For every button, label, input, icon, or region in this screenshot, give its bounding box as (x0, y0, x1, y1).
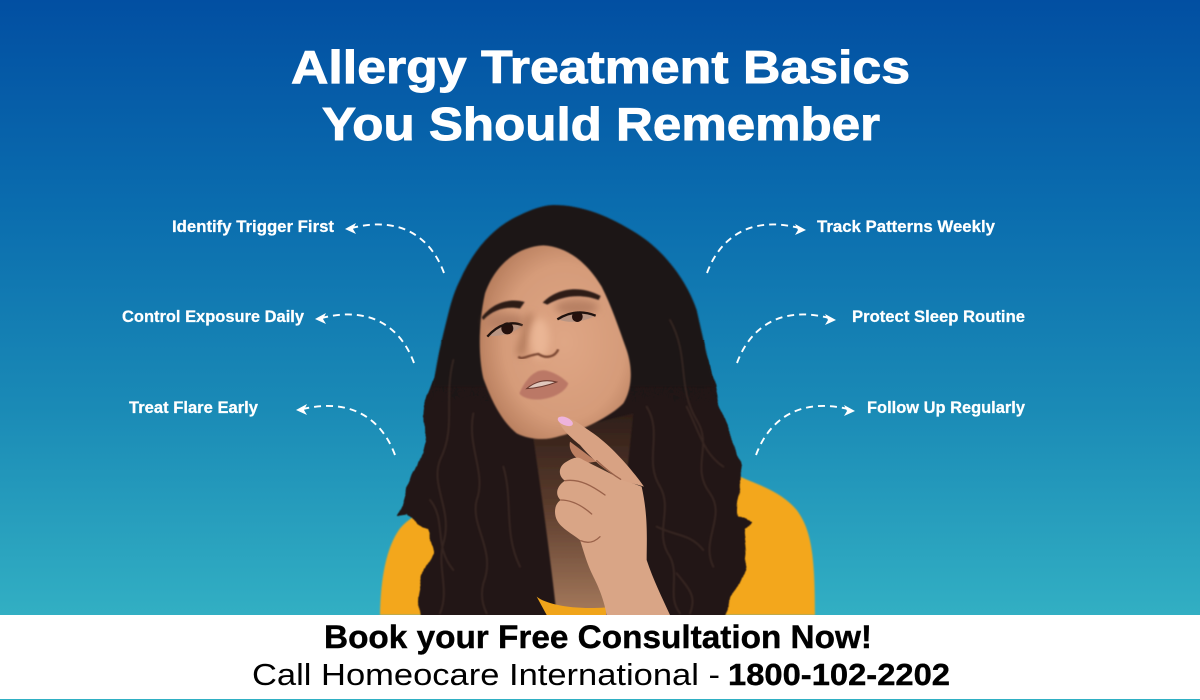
nose highlight (531, 318, 549, 358)
right eyebrow (543, 289, 601, 305)
right label: Track Patterns Weekly: Track Patterns Weekly (817, 218, 996, 236)
title (291, 41, 910, 150)
knuckle creases (561, 461, 621, 542)
upper smooth hair (433, 205, 713, 387)
lower wavy hair (396, 340, 753, 615)
title: Allergy Treatment Basics (291, 41, 910, 93)
left label: Control Exposure Daily (122, 308, 414, 363)
right label: Track Patterns Weekly (707, 218, 996, 273)
left label: Identify Trigger First (172, 218, 444, 273)
illustration: woman touching her chin (380, 205, 815, 620)
right label: Protect Sleep Routine: Protect Sleep Routine (852, 308, 1025, 326)
shirt collar (537, 597, 606, 615)
lips (519, 370, 568, 400)
nose shadow side (517, 313, 533, 357)
phone number: 1800-102-2202 (728, 657, 950, 692)
hair strands (430, 320, 723, 613)
left label: Treat Flare Early (129, 399, 395, 455)
shirt (380, 475, 815, 615)
fingernail (556, 415, 574, 428)
face (480, 245, 631, 439)
footer call-to-action band (0, 615, 1200, 700)
title: You Should Remember (322, 98, 880, 150)
index finger (558, 416, 644, 487)
nostrils (518, 349, 558, 358)
hand and wrist (555, 458, 670, 615)
mouth opening (527, 381, 557, 389)
left eye socket shadow (485, 313, 525, 330)
hidden fingertip (570, 442, 597, 463)
call-to-action heading: Book your Free Consultation Now! (324, 619, 872, 655)
left label: Control Exposure Daily: Control Exposure Daily (122, 308, 305, 326)
left eye (487, 322, 523, 337)
right label: Protect Sleep Routine (737, 308, 1025, 363)
right eye (557, 311, 596, 322)
right label: Follow Up Regularly (756, 399, 1026, 455)
neck and chest (533, 413, 647, 615)
right label: Follow Up Regularly: Follow Up Regularly (867, 399, 1026, 417)
left label: Treat Flare Early: Treat Flare Early (129, 399, 259, 417)
right eye socket shadow (555, 299, 598, 315)
phone line: Call Homeocare International - (252, 657, 720, 692)
left eyebrow (482, 301, 525, 320)
left label: Identify Trigger First: Identify Trigger First (172, 218, 335, 236)
